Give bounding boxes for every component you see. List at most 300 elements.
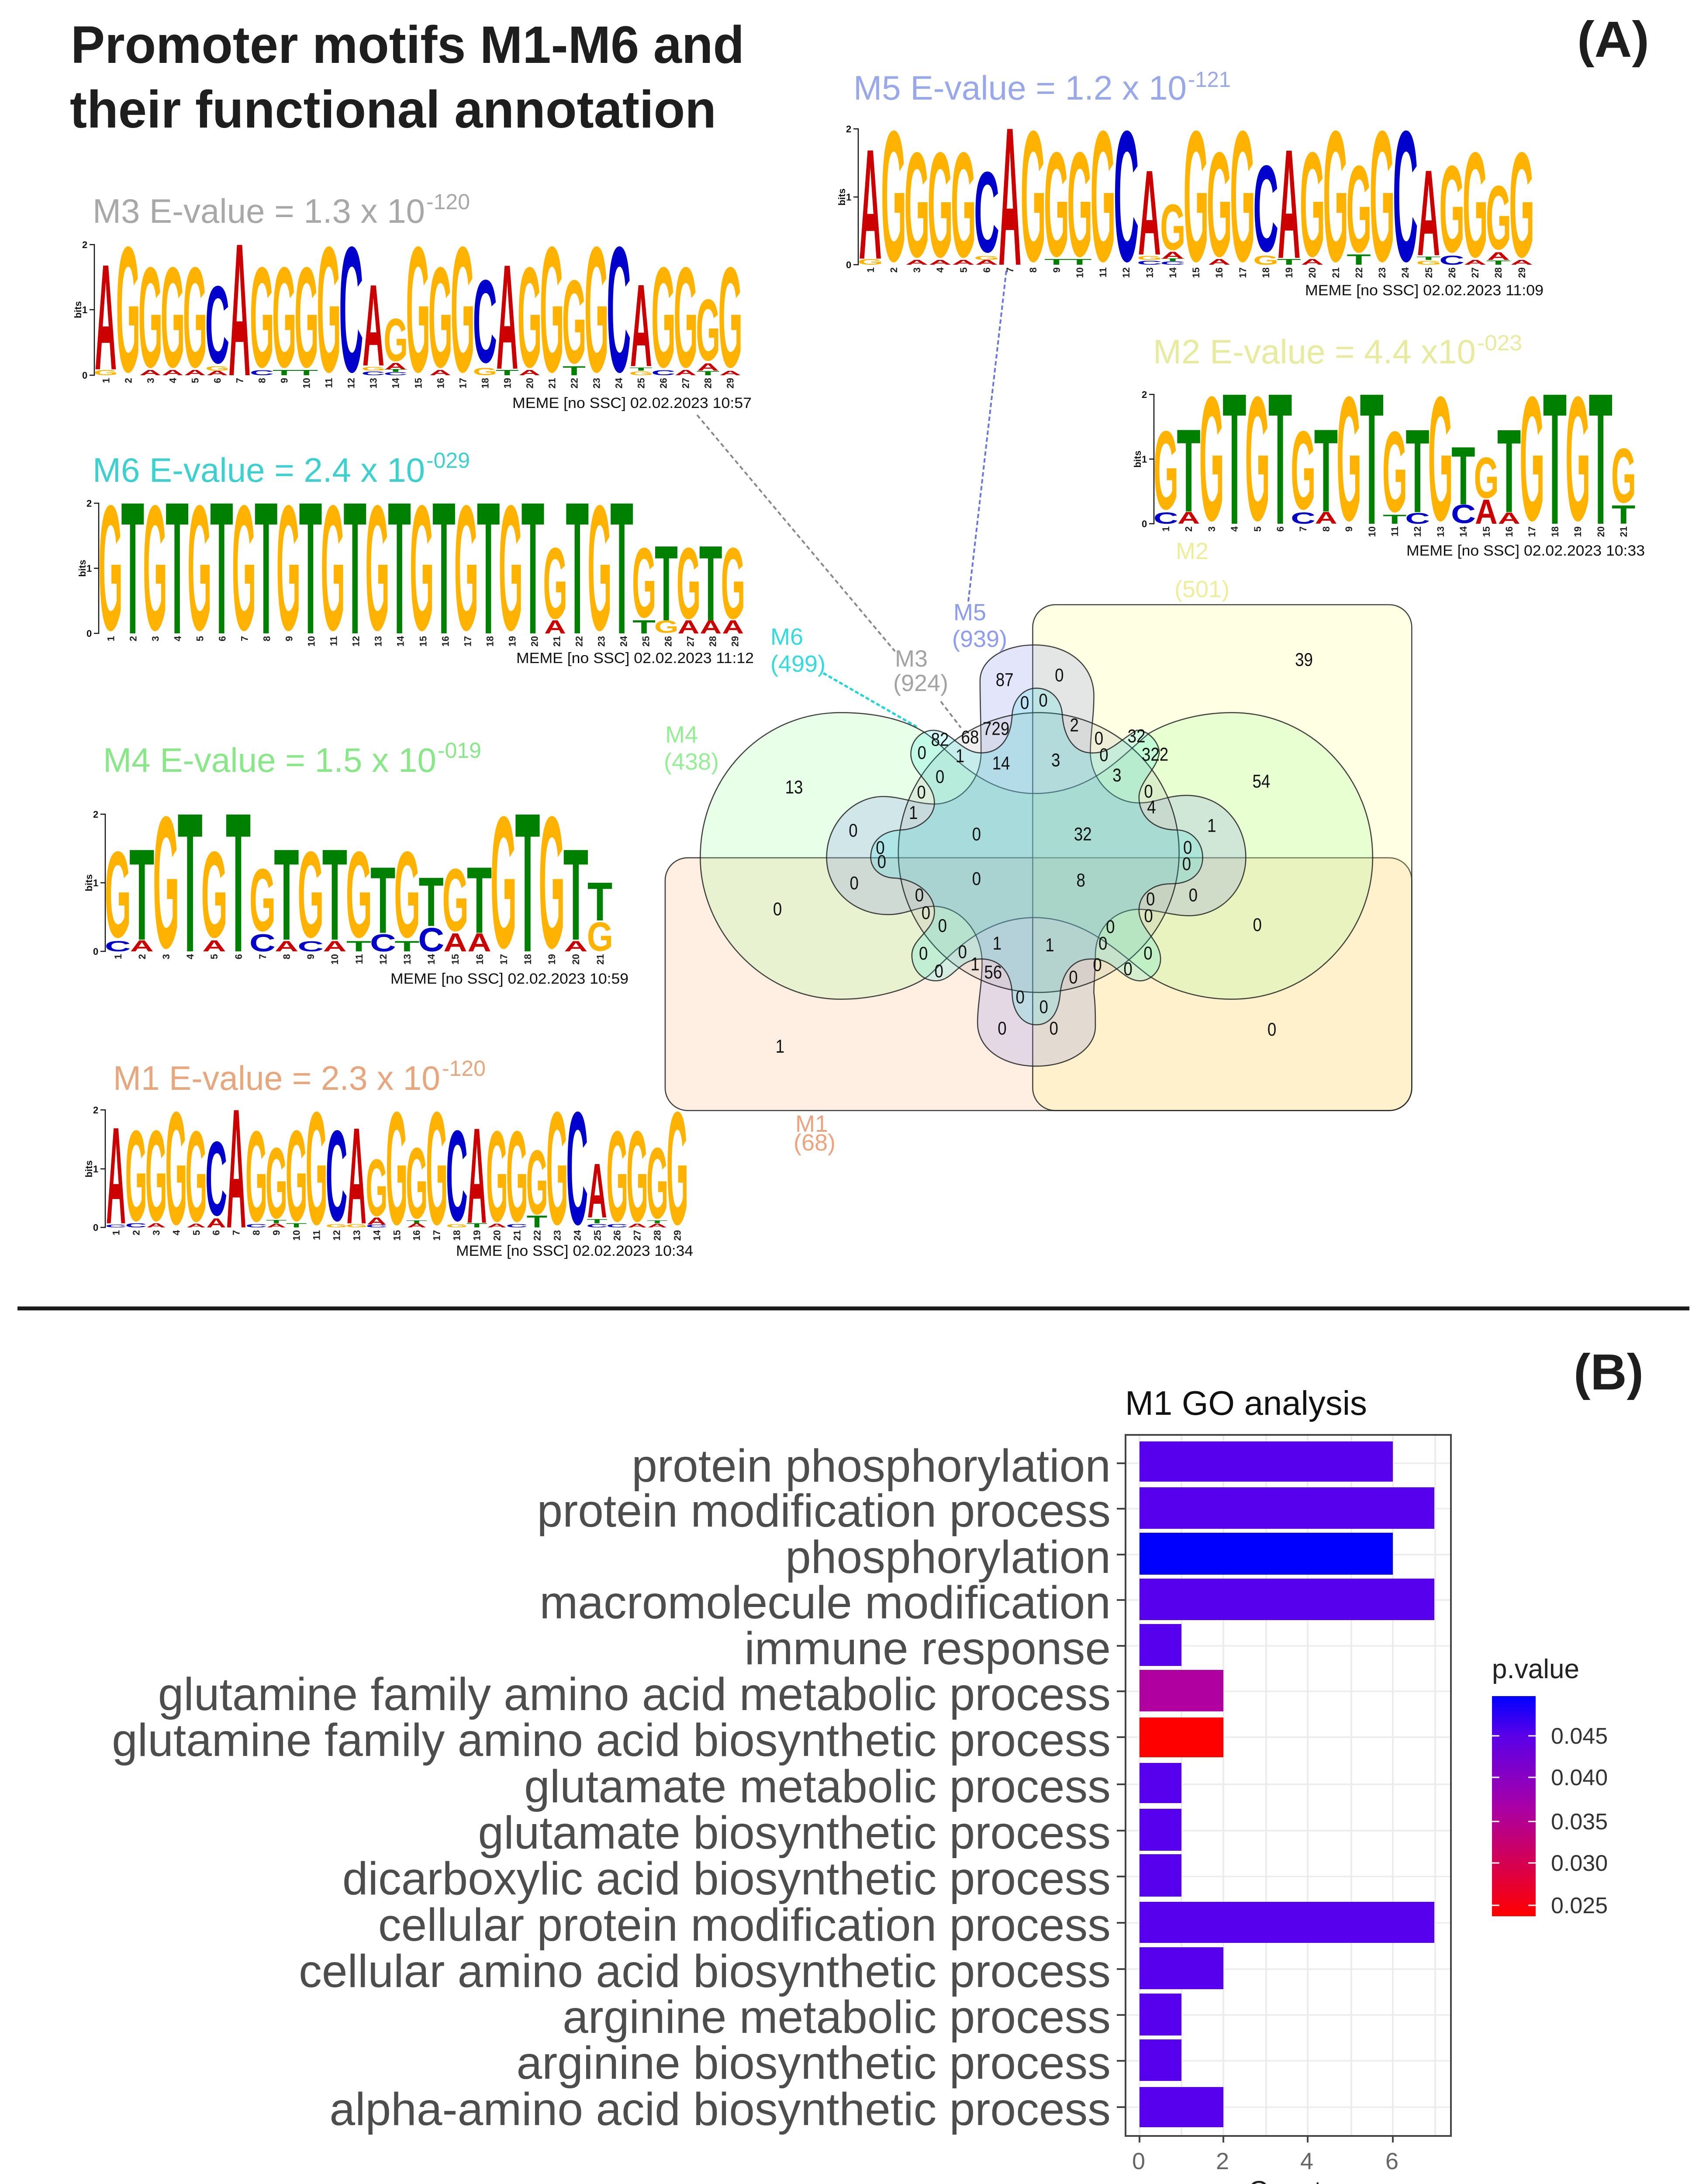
M3 position numbers: 2 (123, 378, 134, 383)
M1 sequence logo: G (145, 1104, 167, 1248)
M1 position numbers: 11 (311, 1230, 322, 1240)
M1 sequence logo: C (125, 1222, 147, 1229)
venn region counts: 0 (936, 767, 944, 787)
M3 sequence logo: C (361, 370, 386, 377)
M3 heading: -120 (426, 190, 470, 214)
M5 sequence logo: G (1463, 121, 1488, 289)
M6 sequence logo: G (187, 469, 211, 668)
M1 sequence logo: T (647, 1220, 668, 1224)
x axis labels (1132, 2148, 1399, 2174)
M6 position numbers: 4 (172, 636, 183, 641)
M5 position numbers: 2 (888, 267, 899, 273)
M1 position numbers: 15 (392, 1230, 403, 1241)
M6 sequence logo: T (655, 524, 678, 644)
y axis labels: macromolecule modification (539, 1577, 1111, 1628)
M3 position numbers: 21 (547, 378, 557, 388)
M2 sequence logo: G (1519, 359, 1544, 557)
M3 sequence logo: C (383, 371, 408, 376)
M2 sequence logo: T (1177, 404, 1201, 537)
M5 sequence logo: A (975, 259, 998, 266)
M4 sequence logo: T (394, 938, 420, 954)
M5 position numbers: 11 (1098, 267, 1108, 277)
M6 position numbers: 23 (596, 636, 607, 646)
set M3 (898, 712, 1179, 992)
M2 sequence logo: G (1382, 407, 1407, 536)
venn region counts: 0 (1016, 987, 1025, 1008)
M5 sequence logo: G (904, 121, 929, 289)
M4 sequence logo: T (587, 871, 612, 933)
M4 sequence logo: G (442, 850, 469, 950)
venn region counts: 0 (1039, 997, 1048, 1017)
M5 position numbers: 8 (1028, 267, 1039, 273)
M5 sequence logo: T (1277, 258, 1301, 266)
set M6 (871, 688, 1203, 1025)
M3 position numbers: 14 (390, 377, 401, 388)
M5 sequence logo (858, 86, 1534, 307)
M3 position numbers: 19 (502, 378, 513, 388)
M6 sequence logo: G (321, 469, 345, 668)
M2 sequence logo: T (1405, 404, 1430, 537)
M3 position numbers: 17 (458, 378, 468, 388)
M4 sequence logo: T (226, 771, 251, 994)
y axis labels: cellular amino acid biosynthetic process (299, 1946, 1111, 1997)
M3 sequence logo: C (339, 210, 363, 410)
venn region counts: 0 (1093, 954, 1102, 975)
venn region counts: 0 (918, 743, 926, 763)
M3 sequence logo: A (139, 368, 161, 377)
M4 axis (83, 809, 105, 957)
M3 position numbers: 15 (413, 378, 424, 388)
M3 position numbers: 29 (725, 378, 736, 388)
M5 sequence logo: G (1486, 167, 1511, 269)
M5 sequence logo: G (1439, 139, 1464, 278)
M6 position numbers: 5 (195, 636, 205, 641)
M1 sequence logo: G (125, 1104, 147, 1248)
venn region counts: 0 (1189, 885, 1198, 905)
venn region counts: 0 (850, 873, 859, 894)
y axis labels: arginine metabolic process (563, 1991, 1111, 2043)
M2 sequence logo: G (1291, 408, 1316, 532)
M3 position numbers: 4 (168, 377, 178, 383)
venn region counts: 0 (1182, 854, 1191, 874)
M2 sequence logo: C (1405, 510, 1430, 527)
M2 position numbers: 10 (1367, 526, 1378, 537)
venn label M4: (438) (664, 749, 719, 775)
M4 sequence logo: T (177, 771, 203, 994)
M1 axis: 1 (93, 1164, 98, 1175)
M5 position numbers: 20 (1307, 267, 1318, 278)
M5 sequence logo: C (1439, 253, 1464, 267)
M4 axis: 2 (93, 809, 98, 820)
M2 position numbers: 16 (1504, 526, 1515, 537)
M1 position numbers: 26 (612, 1230, 623, 1241)
M5 position numbers: 26 (1447, 267, 1457, 278)
M5 position numbers: 21 (1330, 267, 1341, 278)
grid lines (1126, 1435, 1451, 2136)
M2 sequence logo (1153, 354, 1636, 563)
M5 position numbers: 9 (1051, 267, 1062, 273)
M5 sequence logo: G (1160, 191, 1185, 264)
M2 axis: bits (1132, 450, 1143, 468)
M5 sequence logo: A (1487, 250, 1510, 263)
venn region counts: 14 (992, 753, 1010, 774)
venn region counts: 82 (931, 729, 949, 750)
M5 position numbers: 22 (1354, 267, 1364, 278)
M5 sequence logo: A (905, 259, 928, 266)
y axis labels: dicarboxylic acid biosynthetic process (342, 1853, 1111, 1904)
M6 sequence logo: G (232, 469, 256, 668)
M1 position numbers: 5 (191, 1230, 202, 1235)
y axis labels (112, 1440, 1111, 2135)
M1 sequence logo: G (185, 1104, 207, 1249)
venn label M3: (924) (893, 670, 948, 696)
M2 position numbers: 17 (1526, 526, 1537, 537)
M1 position numbers: 23 (552, 1230, 563, 1241)
M1 position numbers: 19 (472, 1230, 483, 1241)
M3 sequence logo: C (250, 369, 274, 377)
M1 sequence logo: G (326, 1223, 348, 1228)
M1 sequence logo: A (226, 1074, 246, 1264)
M1 sequence logo: G (406, 1127, 428, 1240)
venn region counts: 1 (970, 954, 980, 975)
M3 position numbers: 16 (435, 378, 446, 388)
venn region counts: 729 (983, 719, 1009, 739)
M5 position numbers: 15 (1191, 267, 1202, 278)
M3 sequence logo: T (696, 370, 719, 377)
M5 position numbers: 17 (1237, 267, 1248, 278)
M3 sequence logo: A (518, 368, 541, 377)
M3 axis: 0 (82, 370, 87, 381)
M5 sequence logo: A (1208, 258, 1231, 266)
x axis labels: 2 (1216, 2148, 1229, 2174)
M1 sequence logo: G (286, 1104, 307, 1248)
M5 position numbers: 3 (912, 267, 922, 273)
M6 sequence logo: G (721, 527, 745, 640)
M1 sequence logo: C (205, 1120, 227, 1237)
venn region counts: 0 (1039, 690, 1048, 711)
venn region counts: 1 (1045, 935, 1054, 956)
M5 sequence logo: G (1021, 92, 1046, 300)
M5 sequence logo: G (1230, 92, 1255, 300)
M4 sequence logo: A (275, 938, 298, 955)
M3 position numbers: 20 (524, 378, 535, 388)
M4 sequence logo: C (297, 939, 324, 954)
venn label M1: M1 (795, 1111, 828, 1137)
M4 position numbers: 3 (161, 954, 172, 959)
arrow: M6 venn label to region (823, 673, 917, 727)
M4 sequence logo: G (153, 778, 179, 987)
M3 position numbers: 6 (212, 378, 223, 383)
set M1 (665, 858, 1412, 1110)
M6 sequence logo: T (388, 463, 411, 674)
M6 sequence logo: G (143, 469, 167, 668)
M5 sequence logo: A (1278, 117, 1301, 291)
M4 sequence logo: T (346, 938, 371, 954)
venn region counts: 0 (849, 820, 858, 841)
M3 sequence logo: G (562, 256, 587, 388)
M1 position numbers: 3 (151, 1230, 162, 1235)
M4 sequence logo: G (539, 778, 565, 987)
M6 sequence logo: T (610, 463, 633, 674)
M1 sequence logo: G (626, 1104, 648, 1249)
M6 sequence logo: T (699, 524, 722, 644)
M6 sequence logo: T (255, 463, 278, 674)
M3 sequence logo: G (361, 366, 386, 372)
M4 position numbers: 10 (329, 954, 340, 964)
M1 position numbers: 21 (512, 1230, 523, 1241)
M5 sequence logo: A (1417, 145, 1440, 281)
venn region counts: 0 (1123, 959, 1133, 979)
M5 sequence logo: A (929, 259, 952, 266)
M3 sequence logo: T (563, 363, 586, 378)
M1 position numbers: 24 (572, 1230, 583, 1241)
set M4 (700, 712, 1373, 999)
M6 sequence logo: T (566, 463, 589, 674)
M4 position numbers: 13 (402, 954, 413, 964)
venn label M3: M3 (895, 646, 928, 672)
M5 position numbers: 28 (1493, 267, 1504, 278)
venn label M6: (499) (770, 651, 825, 677)
M6 sequence logo: G (654, 617, 678, 637)
M2 position numbers: 21 (1618, 526, 1629, 537)
M6 sequence logo: T (210, 463, 233, 674)
M6 position numbers: 8 (261, 636, 273, 641)
M4 position numbers: 5 (209, 954, 220, 959)
venn region counts: 13 (785, 777, 803, 798)
M5 sequence logo: G (974, 255, 999, 261)
M3 sequence logo: G (651, 238, 676, 397)
M6 position numbers: 26 (663, 636, 673, 646)
M1 sequence logo: A (407, 1222, 427, 1229)
M6 sequence logo: G (365, 469, 390, 668)
M1 heading: M1 E-value = 2.3 x 10 (113, 1059, 440, 1097)
M2 sequence logo: G (1336, 359, 1361, 557)
M3 heading: M3 E-value = 1.3 x 10 (93, 192, 425, 230)
M3 sequence logo: T (273, 368, 296, 377)
M6 sequence logo: A (722, 617, 744, 638)
M6 heading: -029 (426, 448, 470, 473)
M5 sequence logo: C (1160, 260, 1185, 266)
M5 sequence logo: G (1044, 122, 1069, 288)
M4 position numbers (113, 954, 606, 964)
M3 sequence logo: G (183, 238, 207, 397)
M3 position numbers: 24 (613, 377, 625, 388)
venn region counts: 0 (938, 916, 947, 936)
M2 axis (1132, 389, 1154, 529)
venn region counts: 0 (1146, 889, 1155, 909)
M5 position numbers: 18 (1260, 267, 1271, 278)
venn region counts: 0 (1049, 1018, 1058, 1039)
M4 axis: 1 (93, 878, 98, 888)
M3 sequence logo: G (718, 238, 742, 397)
M4 sequence logo: A (468, 928, 491, 957)
y axis labels: protein modification process (537, 1485, 1111, 1537)
M1 position numbers: 17 (432, 1230, 442, 1241)
M4 sequence logo: T (467, 848, 492, 953)
M5 position numbers: 12 (1121, 267, 1132, 278)
M1 sequence logo: A (186, 1223, 206, 1229)
M3 sequence logo: G (518, 238, 542, 397)
M6 position numbers: 27 (685, 636, 696, 646)
M1 axis: 2 (93, 1105, 98, 1116)
venn region counts: 1 (1207, 816, 1216, 836)
M6 heading: M6 E-value = 2.4 x 10 (93, 451, 425, 489)
M1 position numbers: 2 (131, 1230, 142, 1235)
divider (17, 1306, 1689, 1310)
bar chart: M1 GO analysis (112, 1435, 1451, 2184)
M2 sequence logo: A (1475, 492, 1498, 532)
plot frame and ticks (1117, 1435, 1451, 2143)
M4 position numbers: 9 (305, 954, 316, 959)
M2 axis: 0 (1142, 518, 1147, 529)
M6 axis: 0 (86, 628, 92, 639)
M5 heading: -121 (1188, 67, 1231, 92)
M2 sequence logo: T (1383, 512, 1406, 527)
M4 sequence logo: T (322, 822, 347, 968)
M1 sequence logo: G (666, 1079, 688, 1258)
y axis labels: protein phosphorylation (632, 1440, 1111, 1492)
M3 sequence logo: T (629, 366, 653, 372)
M5 sequence logo: A (1510, 259, 1533, 266)
M2 sequence logo: T (1314, 404, 1338, 537)
M1 position numbers: 28 (652, 1230, 663, 1241)
M3 position numbers: 3 (145, 378, 156, 383)
M1 position numbers: 10 (291, 1230, 302, 1241)
title: their functional annotation (70, 79, 716, 139)
M2 position numbers: 12 (1412, 526, 1423, 537)
title: Promoter motifs M1-M6 and (71, 15, 744, 74)
y axis labels: immune response (744, 1623, 1111, 1674)
M4 sequence logo: T (129, 822, 154, 968)
M5 sequence logo: A (1301, 258, 1324, 266)
y axis labels: phosphorylation (785, 1531, 1111, 1583)
venn label M5: M5 (953, 599, 986, 625)
venn region counts: 0 (922, 903, 930, 923)
M5 sequence logo: A (1464, 259, 1487, 266)
M3 sequence logo: T (384, 369, 407, 373)
M3 sequence logo: C (651, 369, 676, 377)
M4 sequence logo: G (346, 826, 372, 963)
M5 heading: M5 E-value = 1.2 x 10 (853, 69, 1187, 107)
M3 sequence logo: G (673, 238, 698, 397)
venn label M5: (939) (952, 626, 1007, 652)
M6 sequence logo: G (98, 469, 123, 668)
M3 sequence logo: C (607, 210, 631, 410)
title (70, 15, 744, 139)
M5 sequence logo: G (1370, 92, 1395, 300)
M3 sequence logo: G (540, 210, 564, 410)
M6 position numbers: 28 (708, 636, 718, 646)
M4 position numbers: 8 (281, 954, 292, 959)
M1 sequence logo: G (165, 1079, 187, 1258)
colour bar labels: 0.045 (1551, 1724, 1608, 1749)
M1 sequence logo: C (326, 1104, 347, 1248)
M3 position numbers: 13 (368, 378, 379, 388)
set M2 (1033, 605, 1412, 1110)
venn region counts: 1 (776, 1036, 784, 1057)
arrow: M3 logo to venn label (697, 415, 961, 728)
M2 position numbers: 19 (1572, 526, 1583, 537)
venn region counts: 0 (972, 824, 981, 845)
venn region counts: 68 (961, 727, 979, 748)
M2 position numbers: 2 (1183, 526, 1194, 532)
M5 sequence logo: C (1114, 93, 1139, 301)
M2 position numbers (1160, 526, 1629, 537)
venn region counts: 0 (1143, 943, 1153, 964)
M6 sequence logo: T (299, 463, 322, 674)
M1 sequence logo: G (386, 1079, 407, 1258)
M6 position numbers: 9 (284, 636, 294, 641)
legend: p.value: p.value (1492, 1654, 1579, 1684)
M5 sequence logo: G (1067, 122, 1092, 288)
M1 sequence logo: A (146, 1222, 166, 1229)
colour bar (1492, 1696, 1536, 1916)
M4 position numbers: 18 (522, 954, 533, 964)
M5 sequence logo: T (1347, 251, 1371, 268)
M6 sequence logo: T (343, 463, 366, 674)
M6 position numbers: 25 (640, 636, 652, 646)
M1 sequence logo: G (446, 1223, 468, 1228)
M6 sequence logo: G (499, 469, 523, 668)
M4 sequence logo: G (201, 826, 228, 963)
M5 sequence logo: A (998, 86, 1021, 307)
panel label B: (B) (1574, 1344, 1644, 1400)
M2 sequence logo: A (1498, 509, 1520, 527)
M5 sequence logo: G (1253, 253, 1278, 268)
M1 position numbers: 12 (332, 1230, 342, 1241)
M6 position numbers: 21 (551, 636, 563, 646)
venn region counts: 56 (984, 962, 1002, 983)
M3 position numbers: 11 (323, 378, 335, 388)
M3 sequence logo: T (496, 368, 519, 377)
M5 sequence logo: C (1253, 139, 1278, 277)
M5 sequence logo: T (1067, 258, 1092, 266)
M3 sequence logo: A (228, 204, 251, 415)
M6 sequence logo: G (677, 527, 701, 640)
M6 position numbers: 24 (618, 636, 629, 646)
M6 position numbers: 13 (373, 636, 383, 646)
M3 sequence logo: C (473, 256, 497, 388)
M1 sequence logo: A (347, 1100, 366, 1253)
M1 MEME caption: MEME [no SSC] 02.02.2023 10:34 (456, 1243, 693, 1259)
venn region counts (773, 650, 1313, 1057)
M2 position numbers: 3 (1206, 526, 1217, 532)
M6 position numbers: 1 (106, 636, 116, 641)
M4 sequence logo (105, 771, 613, 994)
M2 sequence logo: G (1474, 446, 1499, 510)
venn label M2: (501) (1174, 576, 1229, 602)
M6 sequence logo: G (410, 469, 434, 668)
venn region counts: 0 (877, 851, 886, 872)
M3 sequence logo: A (95, 233, 117, 401)
M4 sequence logo: T (515, 771, 540, 994)
M3 axis: 2 (82, 239, 87, 250)
M6 position numbers: 12 (350, 636, 362, 646)
venn region counts: 4 (1147, 797, 1156, 818)
M1 sequence logo: T (266, 1219, 287, 1224)
M6 MEME caption: MEME [no SSC] 02.02.2023 11:12 (516, 650, 754, 667)
M4 axis: 0 (93, 946, 98, 957)
M6 sequence logo: T (632, 616, 656, 637)
M3 sequence logo: G (294, 238, 319, 397)
M2 sequence logo: T (1222, 354, 1247, 563)
M3 sequence logo: G (317, 210, 341, 410)
M6 position numbers: 6 (217, 636, 228, 641)
M6 position numbers (106, 636, 741, 646)
x axis labels: 6 (1385, 2148, 1399, 2174)
M6 position numbers: 10 (306, 636, 317, 646)
venn label M6 (770, 624, 825, 677)
